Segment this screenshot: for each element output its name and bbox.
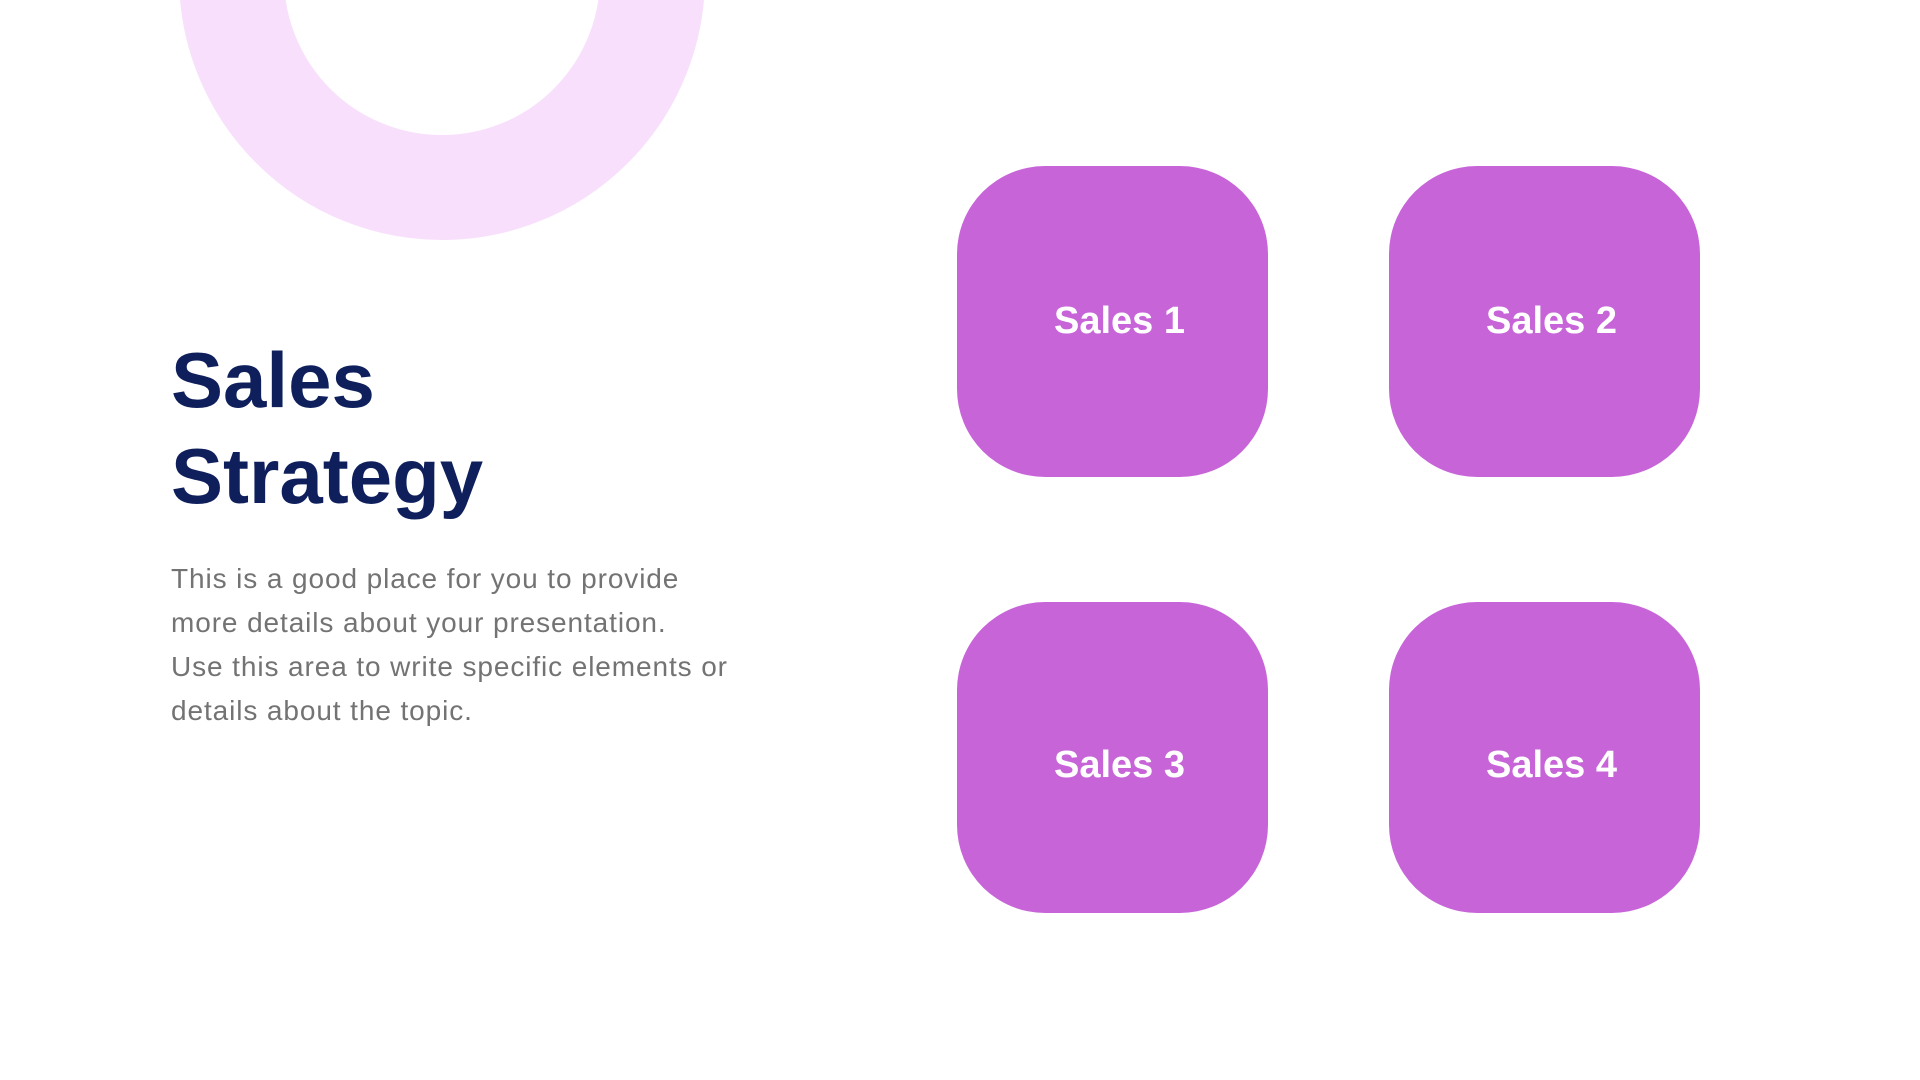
title: Strategy <box>171 432 483 520</box>
box: Sales 4: Sales 4 <box>1486 744 1617 786</box>
decorative ring <box>180 0 704 240</box>
box: Sales 2 <box>1389 166 1700 477</box>
title <box>171 336 483 520</box>
box: Sales 4 <box>1389 602 1700 913</box>
box: Sales 1 <box>957 166 1268 477</box>
box: Sales 3: Sales 3 <box>1054 744 1185 786</box>
body text: more details about your presentation. <box>171 607 667 638</box>
body text: This is a good place for you to provide <box>171 563 679 594</box>
box: Sales 2: Sales 2 <box>1486 300 1617 342</box>
body text: details about the topic. <box>171 695 473 726</box>
body text: Use this area to write specific elements or <box>171 651 728 682</box>
box: Sales 3 <box>957 602 1268 913</box>
title: Sales <box>171 336 375 424</box>
body text <box>171 563 728 726</box>
box: Sales 1: Sales 1 <box>1054 300 1185 342</box>
